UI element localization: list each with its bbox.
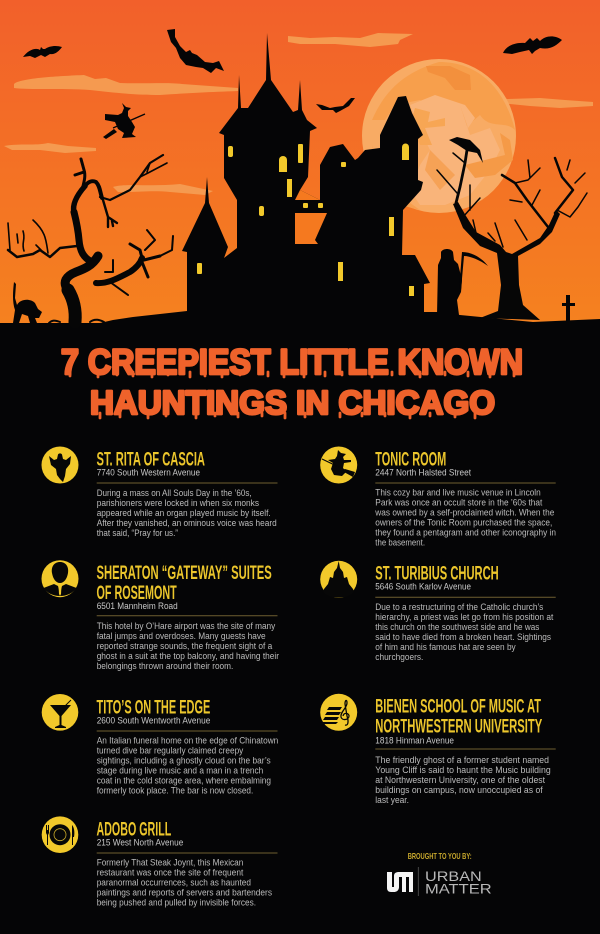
title: 7 CREEPIEST LITTLE KNOWN	[61, 343, 523, 382]
orange gap in castle	[295, 213, 327, 244]
body text: Due to a restructuring of the Catholic church’s	[375, 602, 544, 612]
address: 7740 South Western Avenue	[97, 468, 200, 478]
body text	[375, 602, 554, 662]
body text: fatal jumps and overdoses. Many guests have	[97, 631, 266, 641]
address: 1818 Hinman Avenue	[375, 735, 454, 745]
logo: Urban Matter	[387, 867, 492, 896]
entry: Adobo Grill	[42, 816, 278, 907]
body text: last year.	[375, 795, 409, 805]
body text: the basement.	[375, 538, 425, 548]
body text: being pushed and pulled by invisible forces.	[97, 897, 256, 907]
sponsor block	[387, 851, 492, 896]
body text: paintings and reports of servers and bartenders	[97, 887, 273, 897]
address: 6501 Mannheim Road	[97, 601, 178, 611]
body text: belongings thrown around their room.	[97, 661, 233, 671]
body text: coat in the cold storage area, where embalming	[97, 775, 271, 785]
body text	[97, 621, 279, 671]
lit windows	[197, 144, 414, 296]
address: 2447 North Halsted Street	[375, 468, 472, 478]
heading: TONIC ROOM	[375, 449, 446, 471]
body text: said to have died from a broken heart. Sightings	[375, 632, 552, 642]
icon: man in suit	[42, 560, 78, 597]
icon: ghost	[42, 446, 78, 484]
address: 2600 South Wentworth Avenue	[97, 715, 210, 725]
body text: turned dive bar regularly claimed creepy	[97, 745, 244, 755]
body text: reported strange sounds, the frequent sight of a	[97, 641, 272, 651]
title: HAUNTINGS IN CHICAGO	[90, 384, 495, 421]
icon: plate and cutlery	[42, 816, 78, 853]
body text: Young Cliff is said to haunt the Music building	[375, 765, 551, 775]
body text: This hotel by O’Hare airport was the site of many	[97, 621, 276, 631]
body text: churchgoers.	[375, 652, 423, 662]
orange sky	[0, 0, 600, 330]
clouds	[4, 33, 593, 195]
body text: stage during live music and a man in a trench	[97, 765, 263, 775]
body text: sightings, including a ghostly cloud on the bar’s	[97, 755, 271, 765]
icon: sheet music and treble clef	[320, 694, 357, 731]
body text: restaurant was once the site of frequent	[97, 867, 244, 877]
logo: Urban Matter: URBAN	[425, 869, 482, 884]
body text: An Italian funeral home on the edge of Chinatown	[97, 735, 278, 745]
title	[61, 343, 523, 421]
right tree with raven	[437, 137, 587, 320]
heading: OF ROSEMONT	[96, 582, 177, 604]
body text: ghost in a suit at the top balcony, and having their	[97, 651, 279, 661]
body text: Park was once an occult store in the ’60s that	[375, 498, 543, 508]
body text: The friendly ghost of a former student named	[375, 755, 549, 765]
body text	[97, 735, 278, 795]
body text: parishioners were locked in when six monks	[97, 498, 260, 508]
body text: This cozy bar and live music venue in Lincoln	[375, 488, 541, 498]
icon: church silhouette	[320, 561, 357, 598]
body text: After they vanished, an ominous voice was heard	[97, 518, 277, 528]
body text: formerly took place. The bar is now closed.	[97, 785, 253, 795]
black cat	[13, 282, 42, 323]
body text: this church on the southwest side and he was	[375, 622, 540, 632]
body text: owners of the Tonic Room purchased the space,	[375, 518, 552, 528]
body text: paranormal occurrences, such as haunted	[97, 877, 251, 887]
illustration: haunted house scene	[0, 0, 600, 345]
heading: ADOBO GRILL	[96, 818, 171, 840]
entry: St. Rita of Cascia	[42, 446, 278, 538]
bats	[23, 29, 562, 113]
entry: Tito's on the Edge	[42, 694, 278, 795]
body text: hierarchy, a priest was let go from his position at	[375, 612, 554, 622]
witch on broom	[103, 103, 145, 139]
body text	[375, 755, 551, 805]
raven	[449, 137, 483, 163]
body text: During a mass on All Souls Day in the ’60s,	[97, 488, 252, 498]
body text	[97, 857, 273, 907]
body text	[374, 488, 556, 548]
body text: that said, “Pray for us.”	[97, 528, 178, 538]
heading: ST. TURIBIUS CHURCH	[375, 562, 499, 584]
heading	[96, 562, 272, 604]
left tree	[8, 155, 173, 323]
address: 215 West North Avenue	[97, 837, 183, 847]
cross gravestone	[562, 295, 575, 322]
entry: St. Turibius Church	[320, 561, 556, 662]
entry: Sheraton Gateway Suites	[42, 560, 279, 671]
body text: was owned by a self-proclaimed witch. When the	[374, 508, 554, 518]
entry: Bienen School of Music	[320, 694, 556, 805]
brought to you by label: BROUGHT TO YOU BY:	[408, 851, 472, 861]
address: 5646 South Karlov Avenue	[375, 582, 471, 592]
heading	[375, 696, 542, 738]
entry: Tonic Room	[320, 446, 556, 548]
icon: martini glass	[42, 694, 78, 731]
body text	[97, 488, 277, 538]
body text: they found a pentagram and other iconography in	[375, 528, 556, 538]
body text: appeared while an organ played music by itself.	[97, 508, 271, 518]
moon	[362, 59, 516, 213]
heading: ST. RITA OF CASCIA	[96, 449, 205, 471]
icon: witch on broom	[320, 446, 357, 484]
heading: TITO’S ON THE EDGE	[96, 696, 210, 718]
heading: SHERATON “GATEWAY” SUITES	[96, 562, 272, 584]
logo: Urban Matter: MATTER	[425, 881, 492, 896]
body text: Formerly That Steak Joynt, this Mexican	[97, 857, 243, 867]
body text: of him and his famous hat are seen by	[375, 642, 516, 652]
grim reaper	[437, 249, 488, 315]
body text: at Northwestern University, one of the oldest	[375, 775, 546, 785]
ground and castle silhouette	[0, 33, 600, 345]
body text: buildings on campus, now unoccupied as of	[375, 785, 543, 795]
